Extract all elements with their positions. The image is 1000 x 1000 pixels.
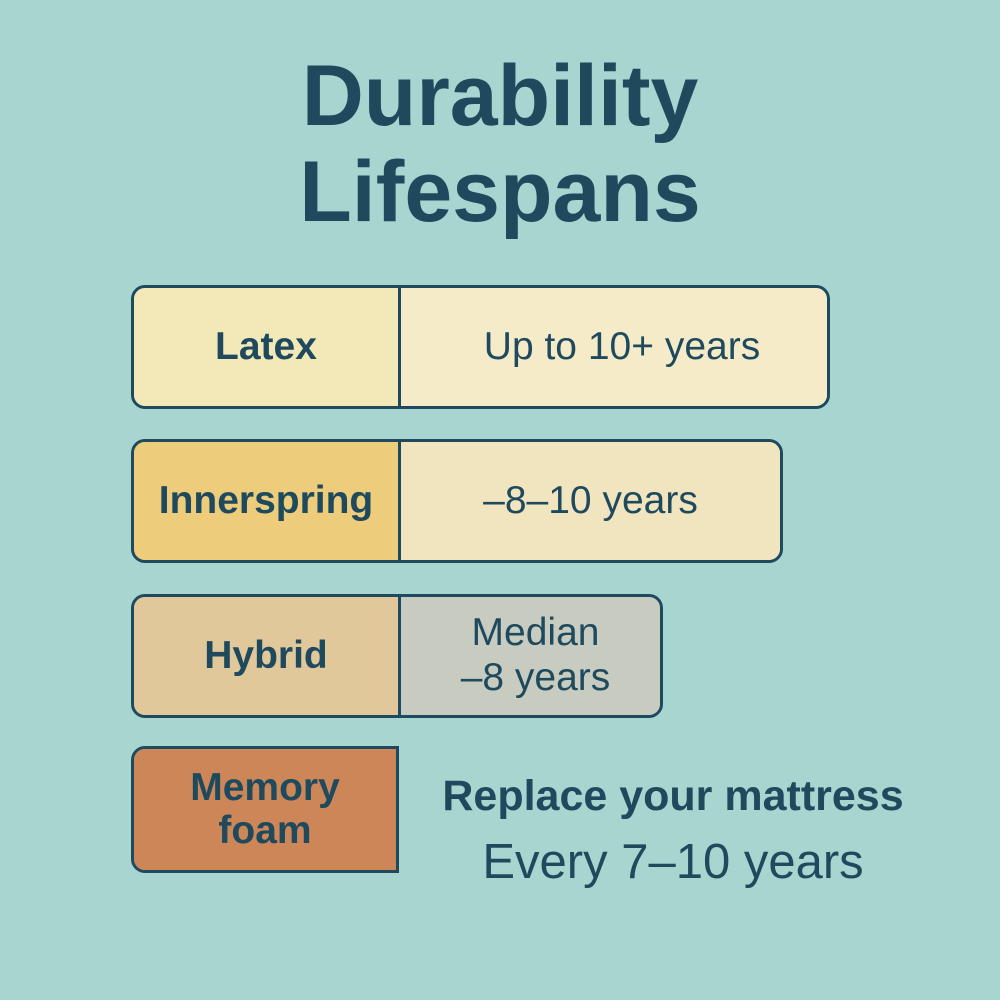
title xyxy=(299,48,701,240)
label: hybrid: Hybrid xyxy=(204,634,328,677)
label: memory foam: Memory xyxy=(190,766,340,809)
value: latex xyxy=(401,288,827,406)
value: innerspring xyxy=(401,442,780,560)
value: hybrid: Median xyxy=(472,611,599,654)
label: latex: Latex xyxy=(215,325,317,368)
label: hybrid xyxy=(134,597,401,715)
row: memory foam xyxy=(131,746,399,873)
label: latex xyxy=(134,288,401,406)
label: innerspring: Innerspring xyxy=(159,479,373,522)
value: hybrid xyxy=(401,597,660,715)
title: Durability xyxy=(302,48,698,144)
callout value: Every 7–10 years xyxy=(482,835,864,889)
value: hybrid: –8 years xyxy=(461,656,610,699)
label: innerspring xyxy=(134,442,401,560)
row: hybrid xyxy=(131,594,663,718)
value: latex: Up to 10+ years xyxy=(484,325,760,368)
value: innerspring: –8–10 years xyxy=(483,479,698,522)
label: memory foam: foam xyxy=(218,808,312,852)
label: memory foam xyxy=(134,749,396,870)
row: innerspring xyxy=(131,439,783,563)
row: latex xyxy=(131,285,830,409)
callout heading: Replace your mattress xyxy=(442,772,904,820)
title: Lifespans xyxy=(299,144,701,240)
callout: replace xyxy=(442,772,904,889)
